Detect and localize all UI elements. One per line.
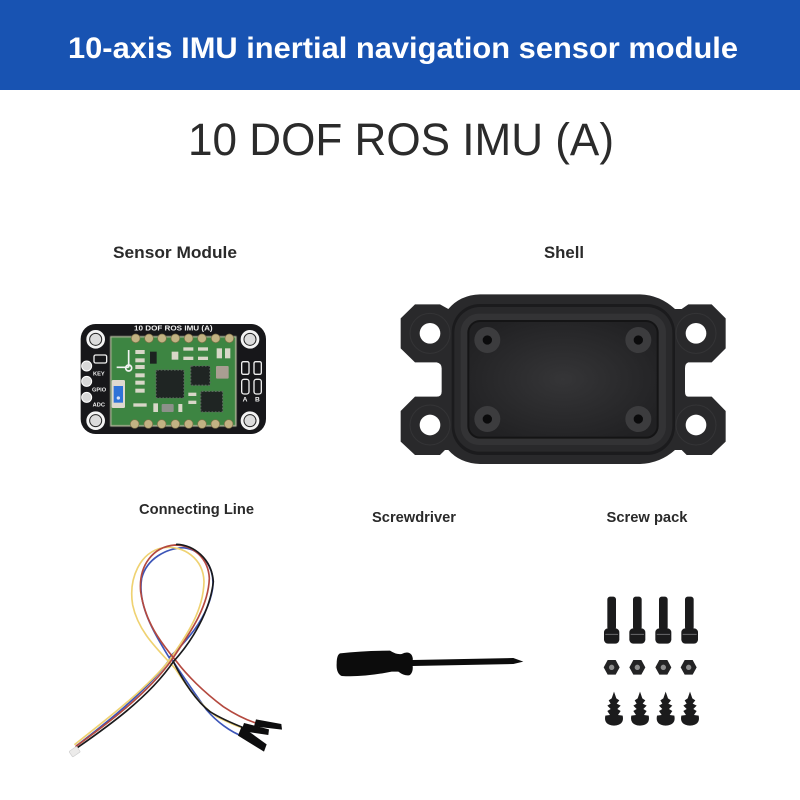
shell outline [401, 294, 726, 464]
red wire [76, 545, 257, 746]
castellated pads [130, 334, 234, 428]
dupont terminals [238, 719, 282, 752]
silver sensor [216, 366, 229, 379]
blue switch [112, 380, 125, 408]
screw posts [474, 327, 651, 432]
passive components [133, 347, 230, 412]
board silkscreen text: ADC [93, 403, 105, 409]
blue wire [77, 548, 243, 746]
shell [401, 294, 726, 464]
ic chips [156, 366, 223, 412]
sensor module board [81, 324, 266, 434]
label: screwdriver: Screwdriver [372, 509, 456, 526]
machine screws [604, 597, 698, 644]
connecting line cable [69, 544, 282, 757]
lug rings [410, 313, 716, 445]
mounting holes [88, 331, 258, 429]
screw head highlights [605, 633, 697, 636]
hex nuts [604, 660, 697, 675]
label: sensor module: Sensor Module [113, 243, 237, 262]
lug holes [420, 323, 706, 435]
label: screw pack: Screw pack [606, 509, 688, 526]
white connector [69, 746, 80, 757]
board silkscreen text: B [255, 396, 260, 403]
board silkscreen text: A [243, 396, 248, 403]
screwdriver [337, 651, 523, 676]
jumper pads [94, 355, 261, 394]
board silkscreen text [92, 326, 260, 409]
axis marks [117, 350, 132, 371]
board silkscreen text: GPIO [92, 388, 107, 394]
small black part [150, 352, 157, 364]
nut holes [609, 665, 691, 670]
tapping screws [605, 692, 699, 726]
title: 10 DOF ROS IMU (A) [188, 114, 614, 165]
board silkscreen text: 10 DOF ROS IMU (A) [134, 326, 213, 333]
label: connecting line: Connecting Line [139, 501, 254, 518]
screw pack [604, 597, 699, 726]
label: shell: Shell [544, 243, 584, 262]
green module [111, 337, 236, 426]
black wire [77, 544, 213, 748]
header banner [0, 0, 800, 90]
board silkscreen text: KEY [93, 371, 105, 377]
header banner: 10-axis IMU inertial navigation sensor module [68, 32, 738, 65]
yellow wire [75, 547, 242, 744]
rim layers [452, 304, 675, 455]
side pads [82, 361, 92, 402]
